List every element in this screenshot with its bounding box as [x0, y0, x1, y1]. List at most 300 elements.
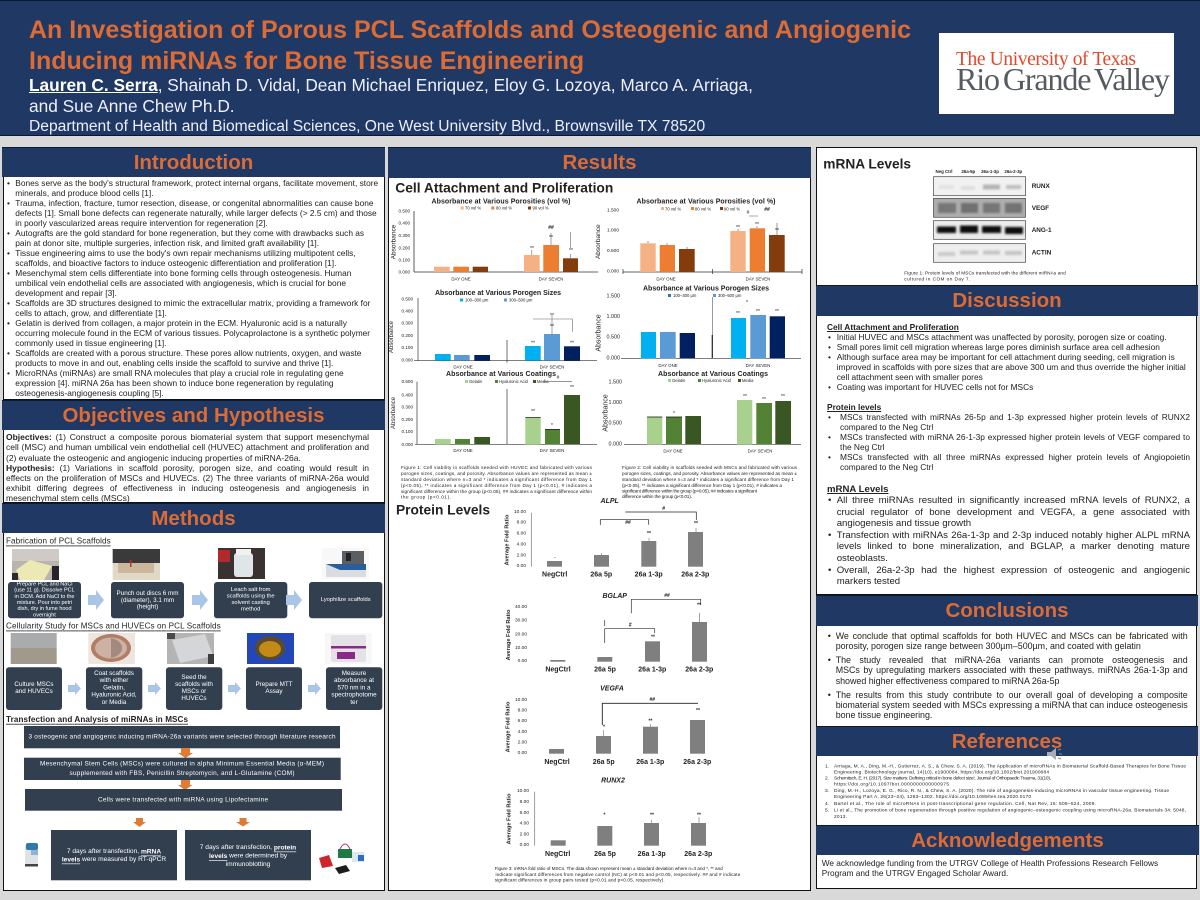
process box: prepare PCL: dish, dry in fume hood [17, 606, 72, 612]
heading: results [388, 147, 811, 178]
process box: prepare MTT: Assay [265, 688, 283, 695]
reference list: Ding, M.-H., Lozoya, E. G., Rico, R. N., & Chew, S. A. (2020). The role of angiogenesis-inducing microRNAs in vascular tissue engineering. Tissue [834, 788, 1169, 794]
figure 2 caption: Figure 2: Cell viability in scaffolds seeded with MSCs and fabricated with various [622, 465, 798, 470]
chart: porogen sizes HUVEC: Absorbance [389, 320, 395, 353]
reference list: 2. [825, 776, 829, 782]
chart: ALPL: 8.00 [517, 520, 526, 526]
chart: coatings HUVEC: Absorbance at Various Coatings [446, 371, 556, 378]
step bar: variant selection: 3 osteogenic and angiogenic inducing miRNA-26a variants were selected through literature research [28, 734, 336, 741]
arrow [88, 590, 104, 610]
process box: culture: Culture MSCs [14, 681, 54, 688]
western blot image: 26a-1-3p [981, 169, 999, 174]
objectives and hypothesis text [6, 432, 369, 503]
chart: BGLAP: 0.00 [518, 658, 527, 664]
chart: VEGFA: NegCtrl [544, 759, 570, 766]
chart: porogen sizes MSC: * [746, 300, 748, 306]
discussion: mRNA levels: mRNA Levels [827, 484, 888, 494]
chart: porosities HUVEC: 0.200 [398, 246, 410, 250]
chart: porosities HUVEC: Absorbance [390, 224, 398, 259]
chart: porogen sizes HUVEC: DAY ONE [453, 364, 473, 370]
process box: measure absorbance: spectrophotome [331, 692, 377, 699]
chart: coatings HUVEC: Gelatin [469, 379, 483, 384]
result box: mRNA: levels were measured by RT-qPCR [62, 856, 166, 863]
western blot image [934, 169, 1052, 262]
title: Inducing miRNAs for Bone Tissue Engineering [29, 47, 584, 75]
process box: prepare MTT: Prepare MTT [255, 681, 293, 688]
process box: coat scaffolds: Gelatin, [103, 684, 125, 692]
process box: seed scaffolds: Seed the [181, 674, 207, 681]
arrow [308, 682, 321, 695]
objectives and hypothesis text: exhibit differing degrees of effectiveness in inducing osteogenesis and angiogenesis in [6, 483, 369, 493]
chart: VEGFA [506, 686, 711, 766]
introduction bullet list: in poorly vascularized areas require intervention for regeneration [2]. [15, 218, 268, 228]
heading: acknowledgements: Acknowledgements [911, 829, 1104, 852]
chart: RUNX2: 26a 2-3p [684, 851, 712, 858]
chart: RUNX2: NegCtrl [545, 851, 570, 858]
figure 2 caption: significant difference within the group (p<0.05), ## indicates a significant [622, 488, 758, 494]
subheading: mRNA levels: mRNA Levels [823, 156, 911, 172]
chart: porosities HUVEC: ** [569, 248, 573, 254]
discussion: protein levels: compared to the Neg Ctrl [840, 422, 933, 432]
chart: porosities HUVEC: DAY ONE [451, 276, 471, 282]
panel: methods [3, 503, 385, 891]
process box: punch discs: (height) [137, 603, 158, 610]
subheading: fabrication of PCL scaffolds: Fabrication of PCL Scaffolds [6, 536, 111, 546]
chart: porosities MSC: 70 vol % [665, 206, 681, 212]
chart: BGLAP: NegCtrl [545, 666, 571, 674]
discussion: mRNA levels: Transfection with miRNAs 26a-1-3p and 2-3p induced notably higher ALPL mRNA [837, 530, 1190, 541]
discussion: cell attachment: Coating was important for HUVEC cells not for MSCs [837, 382, 1033, 392]
heading: objectives and hypothesis [2, 400, 385, 430]
chart: porosities MSC: DAY ONE [656, 276, 676, 282]
chart: ALPL: ** [647, 531, 651, 537]
introduction bullet list: Bones serve as the body's structural framework, protect internal organs, facilitate movement, store [15, 178, 378, 188]
heading: results: Results [562, 151, 637, 174]
process box: measure absorbance: absorbance at [334, 677, 374, 684]
process box: coat scaffolds: Coat scaffolds [94, 670, 134, 677]
chart: porosities HUVEC: Absorbance at Various Porosities (vol %) [432, 198, 570, 206]
chart: BGLAP: 26a 1-3p [638, 666, 666, 674]
chart: BGLAP: 26a 5p [594, 666, 616, 674]
acknowledgement text [822, 858, 1158, 878]
step bar: MSC culture: supplemented with FBS, Penicillin Streptomycin, and L-Glutamine (COM) [70, 770, 294, 777]
chart: BGLAP [506, 593, 713, 674]
process box: coat scaffolds: or Media [102, 699, 127, 706]
chart: VEGFA: 10.00 [515, 697, 527, 703]
introduction bullet list: expression [4]. miRNA 26a has been shown to induce bone regeneration by regulating [15, 378, 334, 388]
heading: methods: Methods [151, 507, 236, 530]
chart: coatings HUVEC: ** [570, 385, 574, 391]
chart: coatings MSC: Absorbance at Various Coatings [658, 371, 768, 378]
reference list: 2013. [834, 814, 847, 820]
figure 1 caption: standard deviation where n=3 and * indicates a significant difference from Day 1 [401, 477, 592, 482]
discussion: mRNA levels: osteoblasts. [837, 553, 888, 564]
chart: coatings HUVEC: 0.100 [402, 429, 413, 434]
introduction bullet list: occurring molecule found in the ECM of various tissues. Polycaprolactone is a synthetic polymer [15, 328, 370, 338]
chart: BGLAP: ## [664, 593, 670, 599]
panel: introduction [3, 147, 385, 400]
chart: coatings MSC: 0.000 [608, 441, 622, 447]
acknowledgement text: Program and the UTRGV Engaged Scholar Award. [822, 868, 1008, 878]
chart: coatings MSC: ** [743, 394, 747, 400]
photo: well plate [167, 633, 214, 664]
introduction bullet list: Trauma, infection, fracture, tumor resection, disease, or congenital abnormalities can cause bone [15, 198, 374, 208]
discussion: mRNA levels: angiogenesis and tissue growth [837, 518, 971, 529]
chart: porogen sizes HUVEC: 0.100 [402, 345, 413, 350]
figure 3 caption: indicate significant differences from negative control (NC) at p<0.01 and p<0.05, respectively. ## and # indicate [496, 872, 741, 877]
chart: BGLAP: ** [697, 603, 701, 609]
step bar: transfection: Cells were transfected with miRNA using Lipofectamine [98, 796, 268, 804]
heading: introduction: Introduction [134, 151, 253, 174]
discussion: protein levels: MSCs transfected with miRNA 26-1-3p expressed higher protein levels of VEGF compared to [840, 432, 1190, 442]
arrow [148, 682, 161, 695]
chart: porogen sizes HUVEC: 0.400 [402, 308, 413, 314]
discussion: mRNA levels [827, 484, 1190, 587]
chart: RUNX2 [506, 778, 712, 858]
chart: RUNX2: ** [697, 812, 701, 818]
conclusions bullet list: bone tissue engineering. [836, 710, 932, 720]
chart: porogen sizes MSC: 300–500 μm [718, 293, 742, 298]
chart: coatings HUVEC: 0.500 [402, 379, 413, 384]
conclusions bullet list [828, 631, 1188, 720]
chart: porosities HUVEC: 0.400 [398, 220, 410, 226]
figure 1 caption: (p<0.05), ** indicates a significant difference from Day 1 (p<0.01), # indicates a [401, 483, 592, 488]
process box: leach salt: scaffolds using the [227, 594, 275, 600]
chart: porosities HUVEC: 80 vol % [496, 206, 512, 210]
chart: porogen sizes HUVEC: ** [531, 340, 535, 346]
chart: BGLAP: 10.00 [515, 645, 527, 651]
chart: coatings HUVEC [391, 371, 597, 453]
figure 3 caption: significant differences in group pairs tested (p<0.01 and p<0.05, respectively). [495, 878, 665, 882]
chart: coatings HUVEC: 0.300 [402, 404, 413, 410]
chart: porosities MSC: 0.000 [607, 268, 619, 274]
chart: porogen sizes HUVEC: Absorbance at Various Porogen Sizes [435, 290, 561, 297]
authors [29, 75, 753, 116]
reference list: 1. [825, 764, 829, 770]
logo: UTRGV: Rio Grande Valley [956, 61, 1169, 97]
header banner [0, 0, 1200, 136]
chart: RUNX2: 0.00 [520, 842, 529, 848]
chart: coatings HUVEC: 0.200 [402, 417, 413, 422]
discussion: protein levels: Protein levels [827, 402, 881, 412]
discussion: mRNA levels: markers tested [837, 576, 900, 587]
introduction bullet list: Mesenchymal stem cells differentiate into bone forming cells through osteogenesis. Human [15, 268, 351, 278]
arrow [178, 748, 193, 758]
result box: protein [185, 830, 311, 880]
figure 1 caption: the group (p<0.01). [401, 494, 451, 500]
chart: BGLAP: 20.00 [515, 632, 527, 638]
introduction bullet list: osteogenesis-angiogenesis coupling [5]. [15, 388, 164, 398]
icon: speaker [1047, 748, 1062, 760]
result box: protein: 7 days after transfection, protein [200, 844, 296, 851]
introduction bullet list: pain at donor site, multiple surgeries, infection risk, and limited graft availability [1]. [15, 238, 319, 248]
reference list: 3. [825, 788, 829, 794]
chart: coatings HUVEC: * [551, 423, 553, 429]
photo: PCL and NaCl mixing [12, 549, 59, 580]
western blot image: ANG-1 [1032, 227, 1052, 234]
chart: coatings MSC: 0.500 [608, 421, 622, 427]
heading: references: References [952, 730, 1062, 753]
chart: coatings MSC: ** [781, 394, 785, 400]
photo: lyophilizer [322, 548, 369, 579]
chart: porosities MSC: # [747, 210, 750, 216]
introduction bullet list: development and repair [3]. [15, 288, 117, 298]
introduction bullet list: Scaffolds are 3D structures designed to mimic the extracellular matrix, providing a framework for [15, 298, 370, 308]
panel: objectives and hypothesis [3, 400, 385, 503]
chart: BGLAP: 26a 2-3p [685, 666, 713, 674]
process box: seed scaffolds: HUVECs [181, 695, 207, 702]
heading: references [816, 726, 1198, 756]
chart: ALPL: Average Fold Ratio [504, 514, 510, 565]
chart: BGLAP: ** [651, 635, 655, 641]
photo: punching discs [113, 549, 160, 580]
panel: conclusions [816, 595, 1197, 726]
chart: RUNX2: 26a 1-3p [638, 851, 666, 858]
chart: porogen sizes MSC: ** [756, 309, 760, 315]
chart: BGLAP: # [629, 622, 632, 628]
result box: protein: levels were determined by [209, 852, 288, 860]
chart: porosities MSC: ** [736, 225, 740, 231]
chart: BGLAP: Average Fold Ratio [506, 609, 512, 660]
chart: coatings MSC: 1.000 [608, 400, 622, 406]
chart: coatings MSC: 1.500 [608, 379, 622, 385]
chart: porogen sizes HUVEC: 0.300 [402, 320, 413, 326]
process box: prepare PCL: (use 11 g). Dissolve PCL [14, 588, 75, 594]
photo: spectrophotometer [325, 633, 372, 664]
heading: methods [2, 503, 385, 533]
chart: porosities HUVEC: 0.500 [398, 208, 410, 214]
process box: leach salt: method [241, 606, 260, 612]
discussion: cell attachment [827, 322, 1186, 392]
chart: coatings HUVEC: DAY ONE [453, 448, 473, 453]
arrow [178, 780, 192, 790]
chart: RUNX2: 2.00 [520, 832, 529, 838]
chart: porosities MSC: 80 vol % [695, 206, 711, 212]
chart: porosities MSC: 1.000 [607, 228, 619, 234]
introduction bullet list: commonly used in tissue engineering [1]. [15, 338, 166, 348]
chart: VEGFA: 0.00 [518, 750, 527, 756]
chart: porosities HUVEC [390, 198, 598, 282]
figure 2 caption: difference within the group (p<0.01). [622, 494, 692, 499]
discussion: protein levels: compared to the Neg Ctrl [840, 462, 933, 472]
photo: MSCs and HUVECs [11, 633, 57, 664]
heading: discussion: Discussion [952, 289, 1062, 312]
arrow [192, 590, 208, 610]
chart: porogen sizes MSC: 0.000 [606, 355, 620, 361]
chart: VEGFA: Average Fold Ratio [506, 701, 512, 752]
figure 2 caption: porogen sizes, coatings, and porosity. Absorbance values are represented as mean ± [622, 471, 797, 476]
chart: porosities MSC: 90 vol % [724, 206, 740, 212]
chart: porogen sizes MSC: 0.500 [606, 335, 620, 341]
chart: VEGFA: 6.00 [518, 718, 527, 724]
process box: prepare MTT [246, 667, 302, 710]
chart: coatings MSC: ** [762, 397, 766, 403]
reference list: Engineering. Biotechnology journal, 14(10), e1900084. https://doi.org/10.1002/biot.201900084 [834, 770, 1049, 776]
photo: leaching salt [218, 548, 265, 579]
chart: ALPL: 26a 2-3p [681, 572, 709, 578]
chart: RUNX2: 10.00 [517, 788, 529, 794]
reference list: Bartel et al., The role of microRNAs in post-transcriptional gene regulation. Cell, Nat Rev, 15: 509–524, 2009. [834, 801, 1096, 807]
figure 2 caption [622, 465, 798, 499]
chart: coatings MSC: Media [742, 378, 754, 383]
introduction bullet list [7, 178, 378, 398]
discussion: cell attachment: cell attachment seen with smaller pores [837, 372, 983, 382]
heading: discussion [816, 285, 1198, 316]
chart: VEGFA: 8.00 [518, 708, 527, 714]
figure 2 caption: standard deviation where n=3 and * indicates a significant difference from Day 1 [622, 477, 794, 482]
chart: porosities MSC: ** [755, 222, 759, 228]
chart: coatings HUVEC: DAY SEVEN [540, 448, 564, 453]
chart: porogen sizes MSC: ** [736, 311, 740, 317]
process box: lyophilize [309, 582, 382, 618]
chart: ALPL: 2.00 [517, 552, 526, 558]
chart: porosities HUVEC: 0.100 [398, 258, 410, 262]
western blot image: ACTIN [1032, 250, 1052, 256]
logo: UTRGV [939, 33, 1174, 114]
process box: seed scaffolds [166, 667, 222, 710]
chart: porosities HUVEC: 0.000 [398, 270, 410, 274]
affiliation: Department of Health and Biomedical Sciences, One West University Blvd., Brownsville TX 78520 [29, 118, 705, 134]
arrow [133, 818, 146, 827]
introduction bullet list: cells to attach, grow, and differentiate [1]. [15, 308, 167, 318]
photo: MTT assay [247, 633, 294, 664]
chart: porosities MSC: Absorbance [595, 224, 602, 259]
figure 1 caption: porogen sizes, coatings, and porosity. Absorbance values are represented as mean ± [401, 471, 592, 476]
chart: RUNX2: 4.00 [520, 820, 529, 826]
introduction bullet list: defects [1]. Small bone defects can regenerate naturally, while larger defects (> 2.5 cm) and those [15, 208, 377, 218]
chart: ALPL: # [662, 506, 665, 512]
chart: porosities HUVEC: ## [548, 225, 554, 231]
process box: lyophilize: Lyophilize scaffolds [321, 597, 371, 603]
process box: leach salt: solvent casting [232, 600, 270, 606]
process box: prepare PCL: overnight [33, 612, 56, 618]
chart: coatings MSC [602, 371, 801, 454]
panel: acknowledgements [816, 825, 1197, 888]
figure 1 caption: Figure 1: Cell viability in scaffolds seeded with HUVEC and fabricated with various [401, 465, 593, 470]
chart: ALPL: ## [625, 520, 631, 526]
result box: mRNA [51, 830, 177, 880]
chart: coatings MSC: * [673, 411, 675, 417]
western blot image: Neg Ctrl [935, 169, 953, 174]
reference list: Li et al., The promotion of bone regeneration through positive regulation of angiogenic–osteogenic coupling using microRNA-26a. Biomaterials 34: 5048, [834, 808, 1186, 814]
objectives and hypothesis text: effects on the proliferation of MSCs and HUVECs. (2) The three variants of miRNA-26a would [6, 473, 369, 483]
reference list: 4. [825, 801, 829, 807]
chart: VEGFA: ** [649, 718, 652, 724]
figure caption: protein levels: Figure 1: Protein levels of MSCs transfected with the different miRNAs and [904, 270, 1066, 276]
result box: mRNA: 7 days after transfection, mRNA [67, 848, 161, 855]
chart: porogen sizes HUVEC: DAY SEVEN [540, 364, 564, 370]
reference list: Arriaga, M. A., Ding, M.-H., Gutierrez, A. S., & Chew, S. A. (2019). The Application of microRNAs in Biomaterial Scaffold-Based Therapies for Bone Tissue [834, 764, 1186, 770]
chart: porosities MSC: 1.500 [607, 208, 619, 214]
chart: porosities HUVEC: 70 vol % [465, 206, 481, 210]
discussion: mRNA levels: levels linked to bone mineralization, and BGLAP, a marker denoting mature [837, 541, 1190, 552]
chart: porosities HUVEC: ** [530, 246, 534, 252]
icon: immunoblot equipment [319, 844, 364, 874]
panel: discussion [816, 285, 1197, 595]
figure 3 caption: Figure 3: mRNA fold ratio of MSCs. The data shown represent mean ± standard deviation where n=3 and *, ** and [495, 866, 723, 871]
chart: porogen sizes MSC: 1.500 [606, 294, 620, 300]
introduction bullet list: minerals, and produce blood cells [1]. [15, 188, 154, 198]
chart: porogen sizes MSC: Absorbance [596, 314, 602, 352]
chart: BGLAP: 30.00 [515, 618, 527, 624]
chart: porogen sizes MSC: ** [775, 309, 779, 315]
chart: RUNX2: 6.00 [520, 810, 529, 816]
panel: mRNA levels blot [816, 147, 1197, 286]
chart: ALPL: 10.00 [514, 509, 526, 515]
step bar: MSC culture: Mesenchymal Stem Cells (MSCs) were cultured in alpha Minimum Essential Media (α-MEM) [40, 760, 324, 768]
heading: introduction [2, 147, 385, 176]
figure caption: protein levels [904, 270, 1066, 282]
subheading: cellularity study: Cellularity Study for MSCs and HUVECs on PCL Scaffolds [6, 622, 221, 630]
process box: coat scaffolds: with either [99, 677, 128, 684]
chart: RUNX2: 8.00 [520, 799, 529, 805]
introduction bullet list: Autografts are the gold standard for bone regeneration, but they come with drawbacks such as [15, 228, 364, 238]
chart: coatings HUVEC: 0.000 [402, 442, 413, 447]
panel: results [388, 147, 811, 891]
process box: leach salt [214, 582, 287, 618]
chart: porogen sizes HUVEC: ** [570, 340, 574, 346]
chart: coatings MSC: Absorbance [602, 394, 610, 432]
chart: ALPL: NegCtrl [542, 572, 567, 578]
process box: measure absorbance [326, 667, 382, 710]
logo: UTRGV: The University of Texas [956, 49, 1136, 70]
chart: VEGFA: ** [696, 708, 700, 714]
introduction bullet list: MicroRNAs (miRNAs) are small RNA molecules that play a crucial role in regulating gene [15, 368, 344, 378]
conclusions bullet list: porosity, porogen size range between 300µm–500µm, and coated with gelatin [836, 641, 1141, 651]
reference list: 5. [825, 808, 829, 814]
introduction bullet list: umbilical vein endothelial cells are associated with angiogenesis, which is crucial for bone [15, 278, 346, 288]
chart: ALPL: - [554, 555, 556, 561]
process box: leach salt: Leach salt from [231, 587, 271, 593]
discussion: protein levels [827, 402, 1190, 472]
heading: objectives and hypothesis: Objectives and Hypothesis [62, 404, 325, 427]
chart: porogen sizes MSC: 1.000 [606, 314, 620, 320]
chart: BGLAP: 40.00 [515, 604, 527, 610]
discussion: cell attachment: improved in scaffolds with pore sizes that are above 300 um and thus override the higher initial [837, 362, 1186, 372]
discussion: mRNA levels: crucial regulator of bone development and VEGFA, a gene associated with [837, 507, 1190, 518]
chart: RUNX2: 26a 5p [594, 851, 616, 858]
chart: porosities HUVEC: 0.300 [398, 233, 410, 238]
chart: VEGFA: * [603, 724, 605, 730]
subheading: cell attachment and proliferation: Cell Attachment and Proliferation [395, 180, 613, 196]
introduction bullet list: scaffolds, and bioactive factors to induce osteogenic differentiation and proliferation [1]. [15, 258, 336, 268]
western blot image: VEGF [1032, 205, 1049, 212]
chart: porogen sizes MSC: 100–300 μm [673, 293, 697, 298]
reference list: Engineering Part A, 26(23–24), 1283–1302. https://doi.org/10.1089/ten.tea.2020.0170 [834, 794, 1031, 800]
chart: VEGFA: 2.00 [518, 740, 527, 746]
arrow [68, 682, 81, 695]
subheading: transfection and analysis: Transfection and Analysis of miRNAs in MSCs [6, 715, 188, 724]
chart: porosities MSC: Absorbance at Various Porosities (vol %) [636, 198, 776, 206]
chart: coatings HUVEC: Media [537, 379, 549, 384]
process box: measure absorbance: ter [350, 699, 358, 706]
chart: ALPL: 26a 5p [590, 572, 612, 578]
chart: porosities MSC: DAY SEVEN [746, 276, 770, 282]
process box: punch discs [111, 582, 184, 618]
process box: culture: and HUVECs [15, 688, 53, 695]
discussion: mRNA levels: All three miRNAs resulted in significantly increased mRNA levels of RUNX2, a [837, 495, 1190, 506]
chart: porogen sizes MSC [596, 286, 801, 368]
western blot image: RUNX [1032, 183, 1051, 190]
arrow [286, 590, 302, 610]
chart: VEGFA: 26a 5p [593, 759, 615, 766]
figure 1 caption: significant difference within the group (p<0.05), ## indicates a significant difference within [401, 489, 592, 494]
introduction bullet list: products to move in and out, enabling cells inside the scaffold to survive and thrive [1]. [15, 358, 333, 368]
introduction bullet list: Scaffolds are created with a porous structure. These pores allow nutrients, oxygen, and waste [15, 348, 361, 358]
chart: RUNX2: RUNX2 [601, 778, 625, 784]
chart: VEGFA: VEGFA [600, 686, 624, 692]
result box: protein: immunoblotting [226, 861, 271, 868]
